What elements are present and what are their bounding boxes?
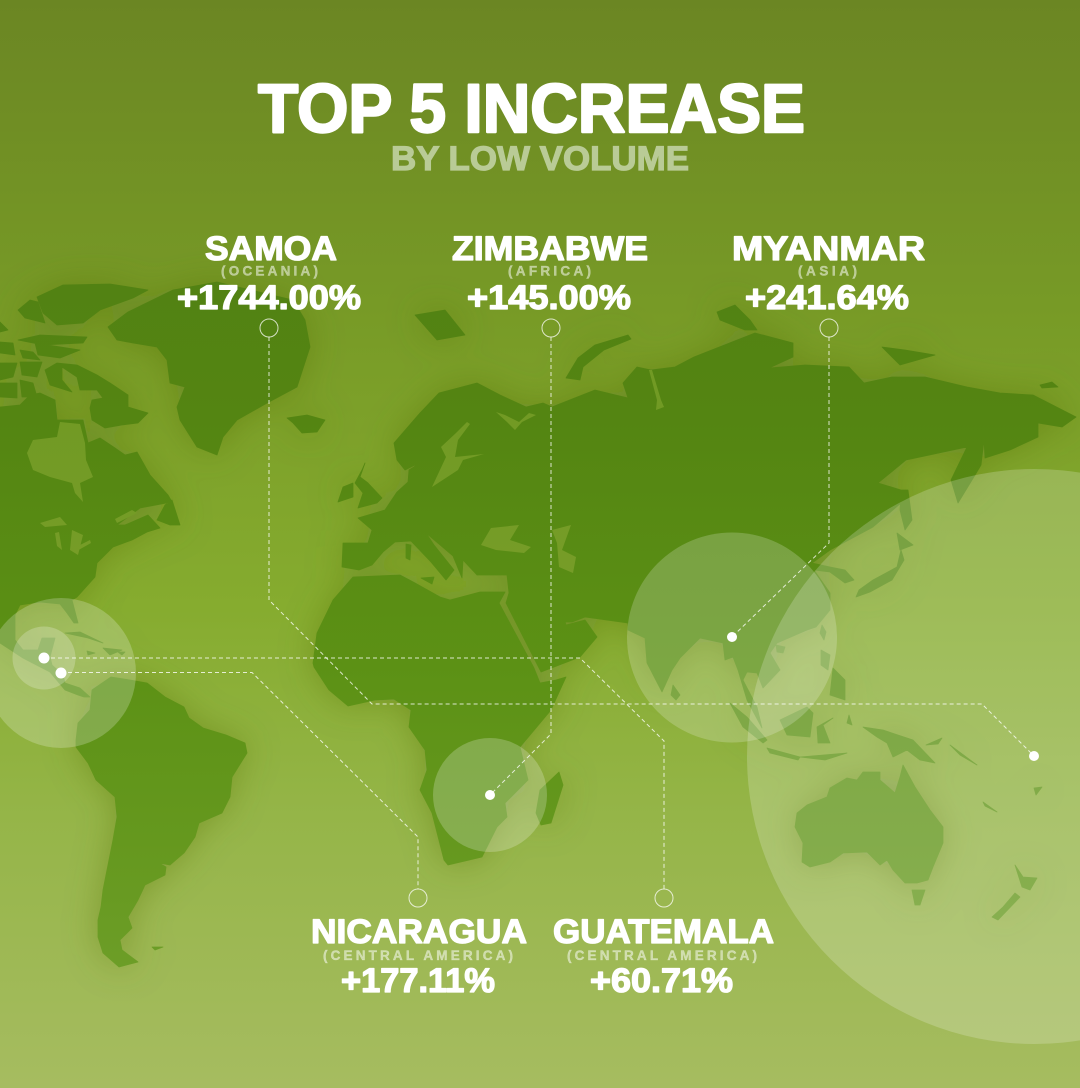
- label: Myanmar: (ASIA): [798, 264, 857, 278]
- label: Nicaragua: [311, 913, 527, 1000]
- title: TOP 5 INCREASE: [258, 70, 805, 147]
- label: Guatemala: +60.71%: [590, 962, 733, 1000]
- label ring: Myanmar: [820, 319, 838, 337]
- connector: Nicaragua: [61, 672, 418, 889]
- label: Nicaragua: (CENTRAL AMERICA): [323, 948, 513, 963]
- label: Zimbabwe: (AFRICA): [508, 264, 591, 278]
- map shadow: [0, 282, 1076, 967]
- label ring: Nicaragua: [409, 889, 427, 907]
- label: Nicaragua: NICARAGUA: [311, 913, 527, 951]
- highlight circle: Guatemala: [12, 626, 76, 690]
- highlight circle: Nicaragua: [0, 598, 136, 748]
- label: Samoa: (OCEANIA): [221, 264, 318, 278]
- label: Nicaragua: +177.11%: [341, 962, 495, 1000]
- label: Zimbabwe: +145.00%: [467, 279, 631, 317]
- location dot: Guatemala: [38, 652, 50, 664]
- label: Zimbabwe: [452, 230, 648, 317]
- label ring: Zimbabwe: [542, 319, 560, 337]
- label ring: Guatemala: [655, 889, 673, 907]
- inland seas and lakes: [27, 370, 664, 573]
- connector: Guatemala: [44, 658, 664, 889]
- label: Samoa: [177, 230, 361, 317]
- label: Samoa: SAMOA: [205, 230, 337, 268]
- location dot: Zimbabwe: [485, 790, 495, 800]
- connector: Samoa: [269, 337, 1034, 756]
- connector: Myanmar: [732, 337, 829, 637]
- highlight circle: Samoa: [747, 469, 1080, 1044]
- label: Myanmar: +241.64%: [745, 279, 909, 317]
- connector: Zimbabwe: [490, 337, 551, 795]
- highlight circle: Zimbabwe: [433, 738, 547, 852]
- highlight circle: Myanmar: [627, 532, 837, 742]
- label ring: Samoa: [260, 319, 278, 337]
- label: Guatemala: (CENTRAL AMERICA): [567, 948, 757, 963]
- label: Zimbabwe: ZIMBABWE: [452, 230, 648, 268]
- subtitle: BY LOW VOLUME: [391, 140, 689, 178]
- land masses: [0, 282, 1076, 967]
- location dot: Myanmar: [727, 632, 737, 642]
- label: Myanmar: [732, 230, 925, 317]
- world map: [0, 282, 1076, 967]
- location dot: Nicaragua: [56, 668, 66, 678]
- label: Myanmar: MYANMAR: [732, 230, 925, 268]
- label: Samoa: +1744.00%: [177, 279, 361, 317]
- label: Guatemala: [553, 913, 774, 1000]
- label: Guatemala: GUATEMALA: [553, 913, 774, 951]
- location dot: Samoa: [1029, 751, 1039, 761]
